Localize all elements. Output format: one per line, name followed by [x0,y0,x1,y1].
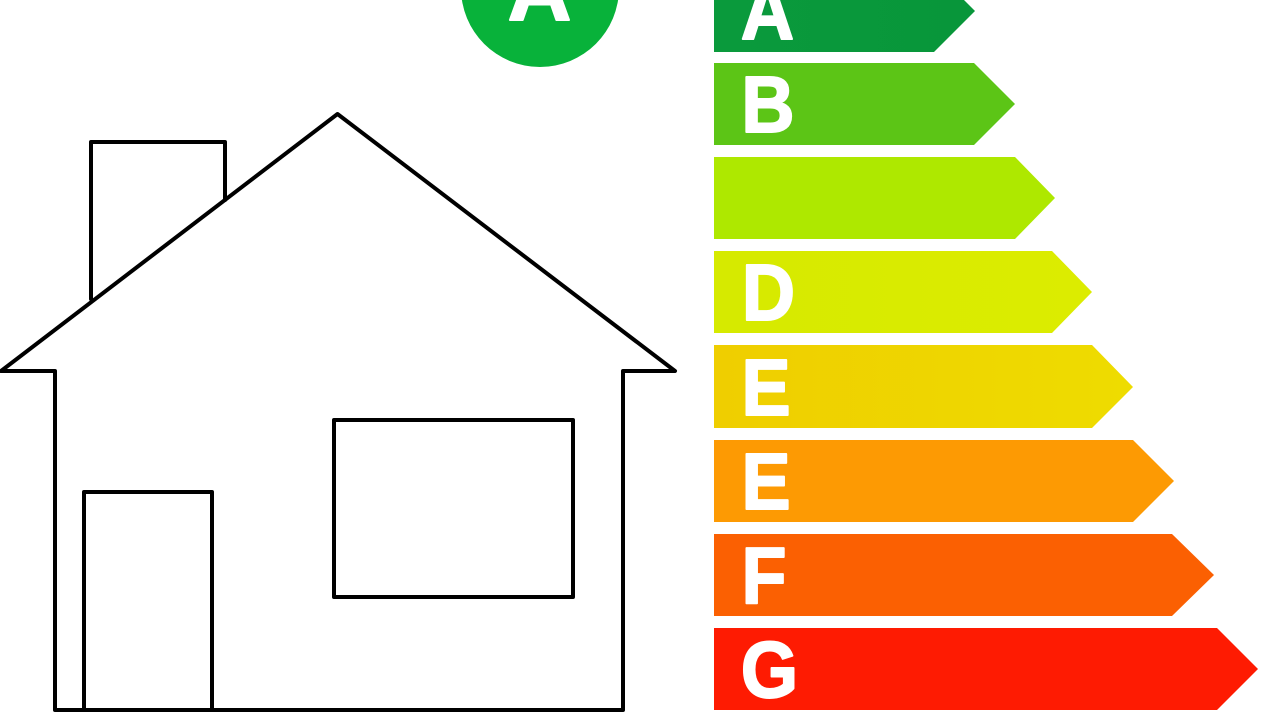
chimney [91,142,225,299]
bar E orange [714,437,1174,527]
bar F: F [742,531,786,621]
house roof and walls [1,114,675,710]
bar F [714,531,1214,621]
bar E yellow [714,343,1133,433]
bar E orange: E [741,437,791,527]
window [334,420,573,597]
bar B [714,60,1015,150]
energy rating scale [714,0,1258,715]
door [84,492,212,710]
bar D [714,248,1092,338]
bar G [714,625,1258,715]
bar G: G [741,625,798,715]
bar A [714,0,975,57]
rating badge circle with letter A [461,0,619,67]
bar C (no letter) [714,157,1055,239]
bar B: B [741,60,795,150]
bar D: D [742,248,795,338]
house outline illustration [1,114,675,710]
bar E yellow: E [741,343,791,433]
